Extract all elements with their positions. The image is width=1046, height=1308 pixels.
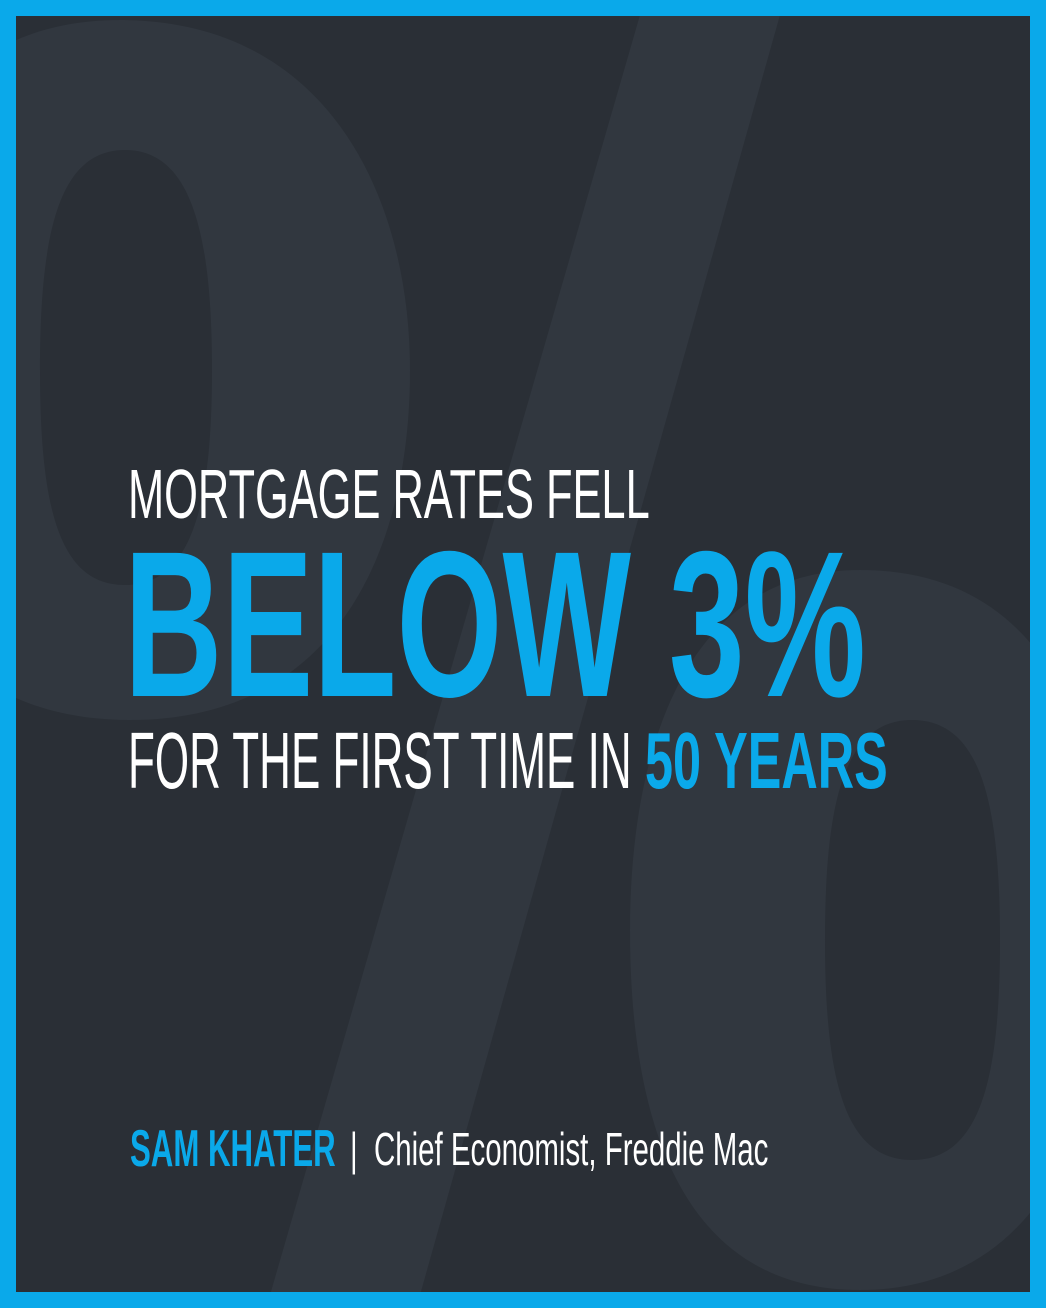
attribution name: SAM KHATER [130, 1120, 336, 1178]
heading line 1: MORTGAGE RATES FELL [128, 455, 650, 533]
headline: below 3%: BELOW 3% [124, 509, 866, 741]
attribution title: | Chief Economist, Freddie Mac [350, 1123, 768, 1175]
highlight: 50 years: 50 YEARS [645, 716, 888, 805]
heading line 3: FOR THE FIRST TIME IN [128, 716, 632, 805]
